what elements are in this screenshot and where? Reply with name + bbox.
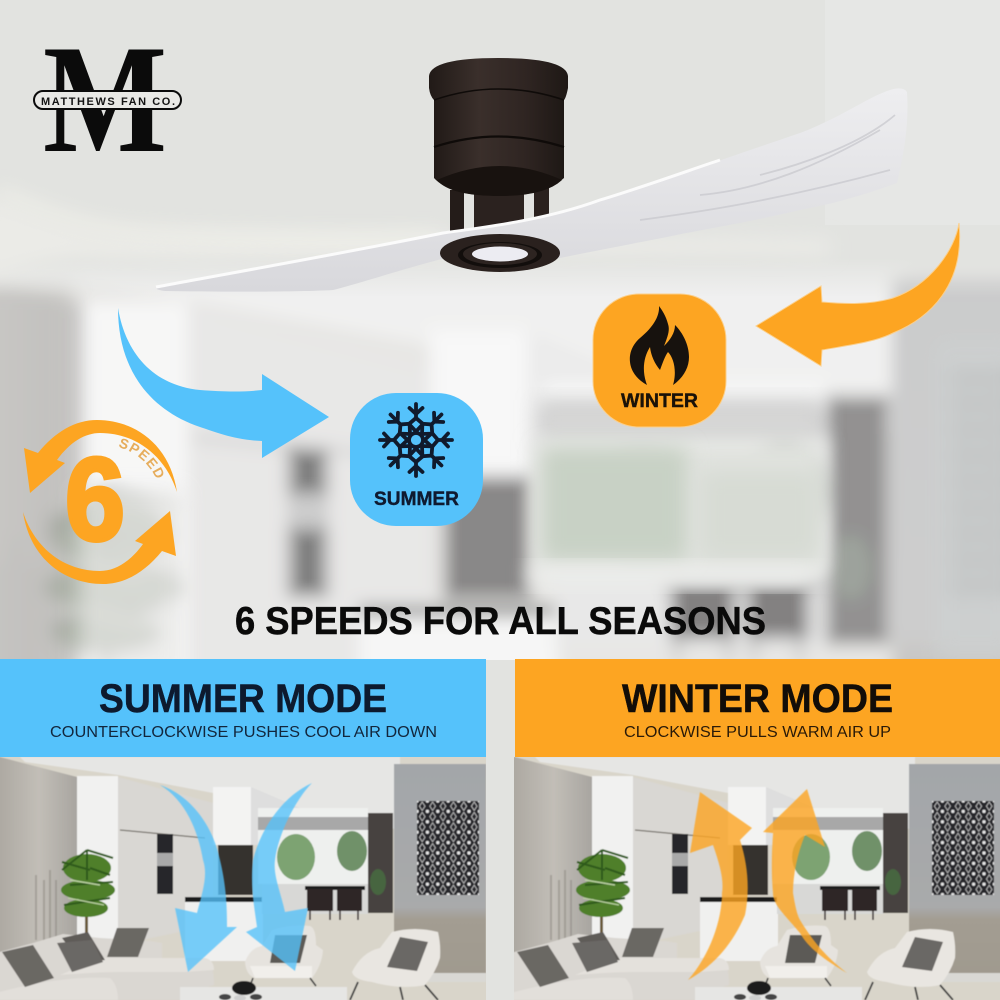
arrow: orange winter flow [755,222,960,367]
icon: flame [630,306,689,385]
ceiling fan [156,58,908,292]
fan motor housing [429,58,568,196]
logo: Matthews Fan Co.: MATTHEWS FAN CO. [41,96,175,108]
text: summer description: COUNTERCLOCKWISE PUSHES COOL AIR DOWN [50,724,437,741]
badge: winter [592,294,726,428]
fan rods and shaft [450,172,549,237]
blurred room background [0,210,1000,660]
speed label: SPEED [119,438,164,478]
lower rotation arrow [23,511,176,584]
room photo: summer with cool air arrows [0,757,486,1000]
arrows: warm air up [688,789,847,980]
label: winter: WINTER [621,391,698,412]
badge: summer [350,393,483,526]
arrow: blue summer flow [118,308,329,458]
room photo: winter with warm air arrows [514,757,1000,1000]
arrows: cool air down [160,783,312,972]
heading: winter mode: WINTER MODE [622,677,893,721]
icon: snowflake [380,404,452,476]
heading: summer mode: SUMMER MODE [99,677,387,721]
fan hub with LED light [440,234,560,272]
panel: summer mode [0,659,486,757]
label: summer: SUMMER [374,489,459,510]
numeral 6: 6 [65,434,125,566]
upper rotation arrow [24,420,177,493]
icon: 6 speed badge [23,420,177,584]
text: winter description: CLOCKWISE PULLS WARM AIR UP [624,724,891,741]
fan blades [156,88,908,292]
panel: winter mode [515,659,1000,757]
